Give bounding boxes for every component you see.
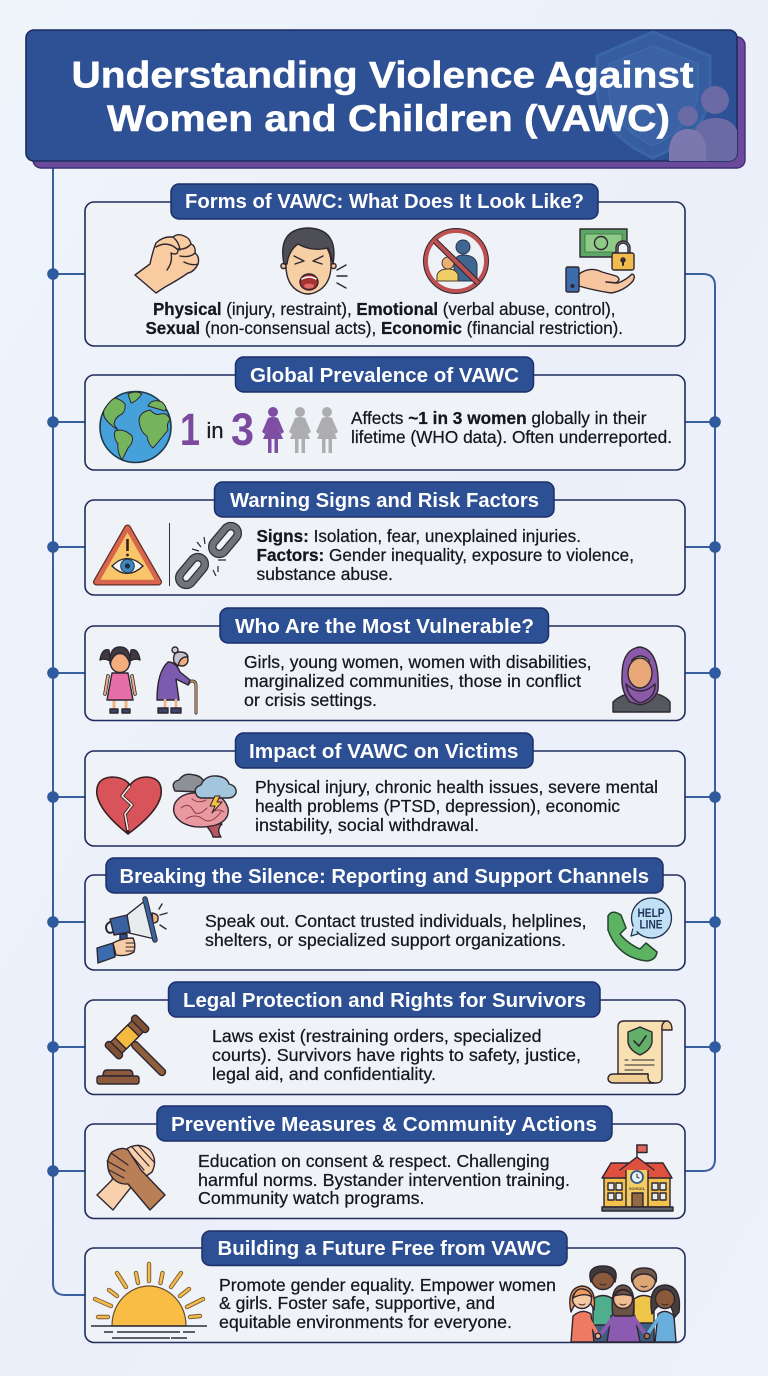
description: lifetime (WHO data). Often underreported.: [351, 427, 672, 447]
description: & girls. Foster safe, supportive, and: [219, 1293, 495, 1313]
heading: Global Prevalence of VAWC: [250, 364, 519, 387]
title: Women and Children (VAWC): [107, 98, 670, 139]
icon: brain under storm clouds: [173, 774, 236, 837]
heading: [171, 184, 598, 219]
icon: helpline phone and bubble: LINE: [640, 920, 663, 932]
divider: [168, 523, 170, 586]
icon: legal scroll with shield: [608, 1021, 672, 1083]
description: health problems (PTSD, depression), economic: [255, 796, 620, 816]
description: [219, 1275, 556, 1332]
description: [146, 299, 623, 338]
statistic: 1 in 3: [180, 404, 254, 455]
description: Factors: Gender inequality, exposure to violence,: [256, 545, 634, 565]
icon: globe: [100, 392, 171, 462]
description: courts). Survivors have rights to safety, justice,: [212, 1045, 581, 1065]
heading: Preventive Measures & Community Actions: [171, 1113, 597, 1136]
icon: woman in hijab: [613, 647, 670, 712]
description: Promote gender equality. Empower women: [219, 1275, 556, 1295]
heading: Building a Future Free from VAWC: [218, 1237, 551, 1260]
heading: [236, 733, 533, 768]
heading: [220, 608, 548, 643]
panel: global prevalence: [85, 357, 685, 470]
icon: gavel: [97, 1014, 180, 1090]
icon: fist: [135, 235, 199, 293]
description: marginalized communities, those in conflict: [244, 671, 581, 691]
description: harmful norms. Bystander intervention training.: [198, 1170, 570, 1190]
description: Girls, young women, women with disabilities,: [244, 652, 592, 672]
icon: three women: [262, 407, 338, 453]
description: [256, 526, 634, 584]
description: Sexual (non-consensual acts), Economic (financial restriction).: [146, 318, 623, 338]
description: Education on consent & respect. Challenging: [198, 1151, 550, 1171]
heading: Legal Protection and Rights for Survivors: [183, 989, 586, 1012]
icon: shield and people watermark: [597, 32, 740, 161]
heading: [236, 357, 534, 392]
description: [255, 777, 658, 835]
panel: preventive measures: [85, 1106, 685, 1218]
description: [244, 652, 592, 710]
description: Speak out. Contact trusted individuals, helplines,: [205, 911, 586, 931]
description: equitable environments for everyone.: [219, 1312, 512, 1332]
heading: [168, 982, 600, 1017]
icon: helpline phone and bubble: HELP: [638, 908, 665, 920]
description: instability, social withdrawal.: [255, 815, 479, 835]
icon: broken heart: [97, 777, 161, 834]
header banner: [26, 30, 745, 168]
description: [212, 1026, 581, 1084]
description: [198, 1151, 570, 1208]
description: shelters, or specialized support organizations.: [205, 930, 566, 950]
description: Affects ~1 in 3 women globally in their: [351, 408, 647, 428]
heading: [106, 858, 663, 893]
description: Laws exist (restraining orders, specialized: [212, 1026, 542, 1046]
icon: diverse group of people: [570, 1266, 679, 1342]
statistic: 1 in 3: 1: [180, 404, 200, 455]
description: Physical (injury, restraint), Emotional (verbal abuse, control),: [153, 299, 616, 319]
icon: prohibited control: [426, 231, 486, 291]
icon: warning triangle with eye: [96, 528, 158, 582]
statistic: 1 in 3: 3: [231, 404, 254, 455]
icon: girl: [100, 647, 140, 713]
heading: Impact of VAWC on Victims: [249, 740, 518, 763]
icon: elderly woman: [157, 647, 196, 713]
statistic: 1 in 3: in: [206, 418, 224, 443]
title: [72, 54, 694, 139]
panel: legal protection: [85, 982, 685, 1094]
icon: money, lock and hand: [566, 229, 634, 293]
icon: school building: [602, 1145, 673, 1211]
description: [351, 408, 672, 447]
connector lines and nodes: [47, 161, 721, 1295]
panel: building a future: [85, 1231, 685, 1342]
icon: shouting face: [281, 228, 347, 294]
icon: helpline phone and bubble: [608, 898, 672, 961]
description: substance abuse.: [256, 564, 393, 584]
panel: forms of VAWC: [85, 184, 685, 346]
heading: Who Are the Most Vulnerable?: [235, 615, 534, 638]
heading: Warning Signs and Risk Factors: [230, 489, 539, 512]
description: Physical injury, chronic health issues, severe mental: [255, 777, 658, 797]
title: Understanding Violence Against: [72, 54, 694, 96]
icon: clasped hands: [97, 1145, 165, 1210]
heading: [202, 1231, 567, 1266]
icon: school building: SCHOOL: [629, 1186, 646, 1191]
description: [205, 911, 586, 950]
icon: rising sun: [91, 1264, 207, 1338]
heading: [157, 1106, 612, 1141]
icon: megaphone: [97, 899, 167, 963]
panel: most vulnerable: [85, 608, 685, 720]
heading: Forms of VAWC: What Does It Look Like?: [185, 190, 584, 213]
heading: Breaking the Silence: Reporting and Support Channels: [120, 865, 649, 888]
panel: warning signs: [85, 482, 685, 595]
description: or crisis settings.: [244, 690, 377, 710]
description: Signs: Isolation, fear, unexplained injuries.: [256, 526, 581, 546]
description: legal aid, and confidentiality.: [212, 1064, 436, 1084]
heading: [214, 482, 554, 517]
panel: breaking the silence: [85, 858, 685, 970]
description: Community watch programs.: [198, 1188, 424, 1208]
panel: impact on victims: [85, 733, 685, 846]
icon: broken chain: [176, 523, 241, 588]
